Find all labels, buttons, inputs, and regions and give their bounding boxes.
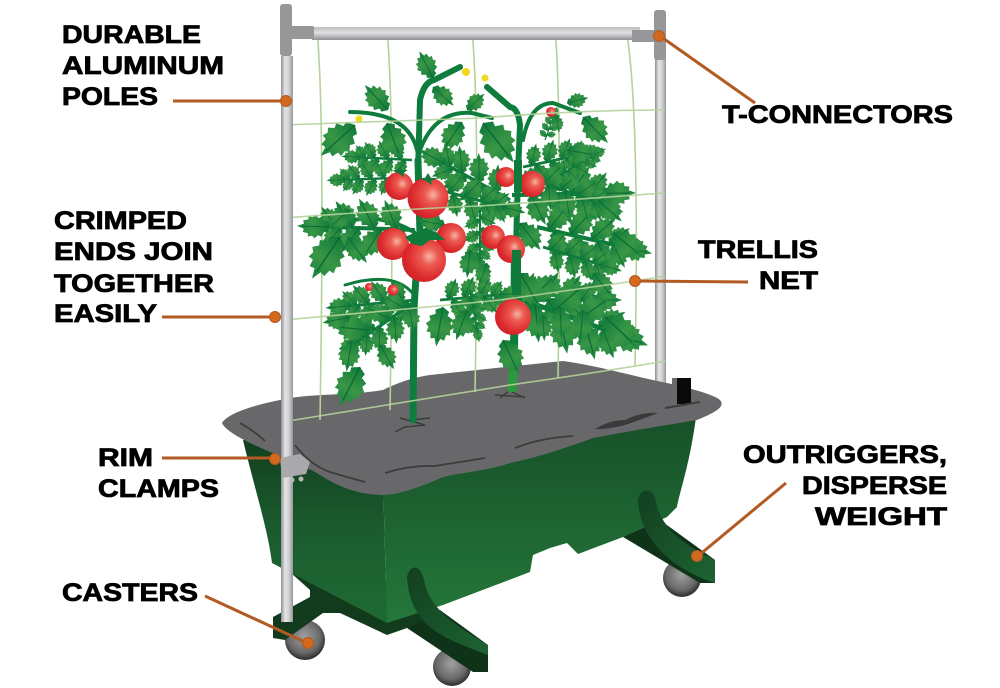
tub left face <box>243 440 387 623</box>
callout: casters <box>62 579 314 648</box>
callout: crimped ends <box>54 207 280 328</box>
callout: T-connectors <box>654 30 953 129</box>
trellis net: horizontal strands <box>282 110 666 422</box>
large leaflets <box>298 47 651 413</box>
callout: crimped ends: CRIMPED <box>54 207 187 235</box>
callout: poles: DURABLE <box>62 21 201 49</box>
callout: outriggers: OUTRIGGERS, <box>743 441 947 469</box>
rim clamp <box>280 454 310 482</box>
top horizontal bar and T-connectors <box>280 4 658 56</box>
caster wheel: back right <box>663 559 701 597</box>
left aluminum pole <box>281 56 293 622</box>
stems <box>345 67 580 420</box>
callout: poles: POLES <box>62 83 158 111</box>
callout: rim clamps: RIM <box>98 444 153 472</box>
fabric mulch cover <box>222 361 722 495</box>
callout: poles: ALUMINUM <box>62 52 224 80</box>
outrigger: front <box>407 568 488 672</box>
callout: trellis net: NET <box>759 267 818 295</box>
planter tub <box>243 410 715 672</box>
callout: crimped ends: EASILY <box>54 300 157 328</box>
tomato calyxes and upper stems <box>392 160 522 295</box>
callout: outriggers: WEIGHT <box>815 503 947 531</box>
callout: outriggers <box>692 441 947 562</box>
trellis net: vertical strands <box>317 28 636 420</box>
outrigger: back left and base <box>273 555 430 640</box>
callout: trellis net: TRELLIS <box>698 236 818 264</box>
callout: T-connectors: T-CONNECTORS <box>722 101 953 129</box>
callout: rim clamps: CLAMPS <box>98 475 219 503</box>
callout: trellis net <box>630 236 818 295</box>
tomatoes <box>365 107 556 335</box>
outrigger: back right <box>623 491 715 583</box>
tub front face <box>383 410 697 623</box>
callout: poles <box>62 21 292 111</box>
compound leaves <box>296 103 663 385</box>
callout: crimped ends: TOGETHER <box>54 270 214 298</box>
callout: casters: CASTERS <box>62 579 198 607</box>
right aluminum pole <box>654 10 666 385</box>
black water fill post <box>665 378 700 408</box>
caster wheel: front center <box>433 648 471 686</box>
flowers <box>356 68 488 122</box>
caster wheel: front left <box>285 620 325 660</box>
callout: crimped ends: ENDS JOIN <box>54 238 213 266</box>
callout: outriggers: DISPERSE <box>802 472 947 500</box>
tomato plant <box>296 47 663 420</box>
callout: rim clamps <box>98 444 280 503</box>
